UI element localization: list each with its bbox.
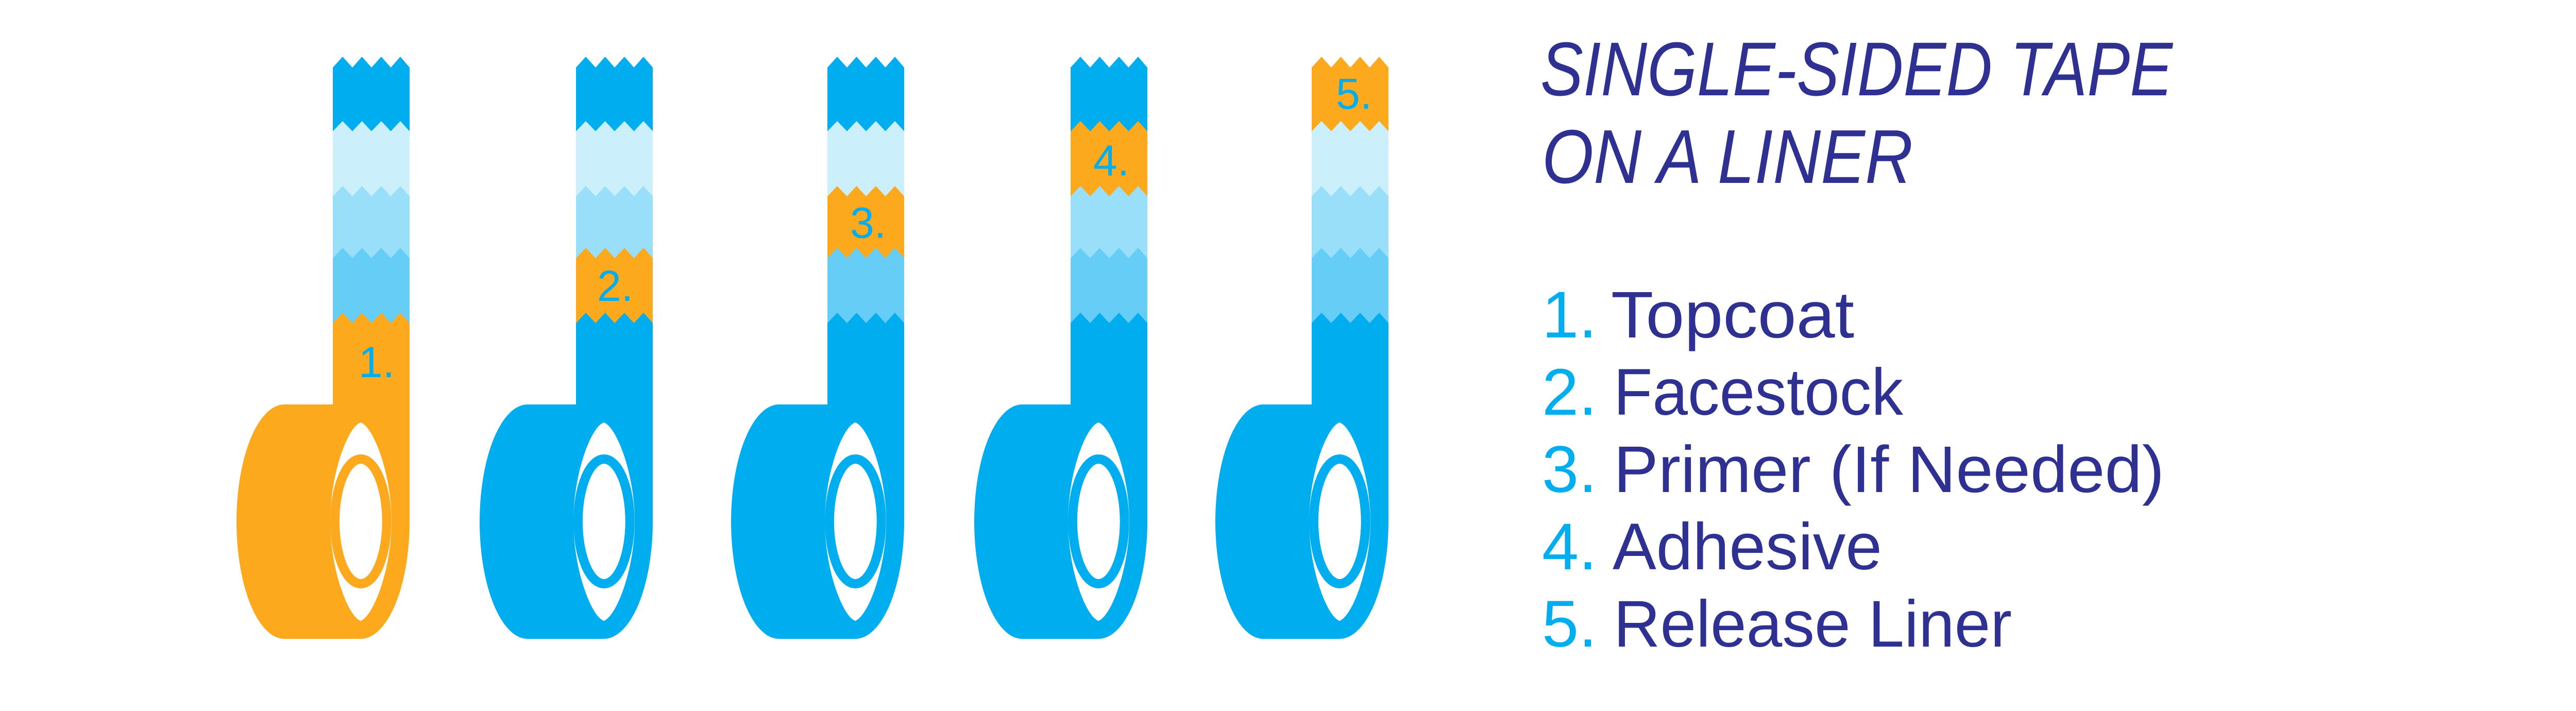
legend item 3: 3. xyxy=(1542,433,1597,506)
tape roll 4: adhesive highlighted xyxy=(974,57,1147,639)
tape layer: third xyxy=(333,186,410,260)
tape layer: fourth xyxy=(333,248,410,326)
roll core ring xyxy=(1073,459,1125,584)
tape layer: second highlighted xyxy=(1071,121,1147,198)
tape layer: second xyxy=(576,121,653,198)
legend item 5: 5. xyxy=(1542,587,1597,661)
tape layer: third highlighted xyxy=(827,186,904,260)
tape roll 5: release liner highlighted xyxy=(1215,57,1388,639)
roll body with tail xyxy=(974,313,1147,639)
roll body with tail xyxy=(236,313,410,639)
label: 4.: 4. xyxy=(1093,137,1129,185)
legend item 3: Primer (If Needed) xyxy=(1614,433,2164,506)
title: SINGLE-SIDED TAPE xyxy=(1540,27,2174,112)
tape layer: second xyxy=(827,121,904,198)
tape layer: fourth xyxy=(1312,248,1388,326)
tape layer: top highlighted xyxy=(1312,57,1388,134)
legend item 2: 2. xyxy=(1542,356,1597,429)
roll body with tail xyxy=(731,313,904,639)
tape layer: third xyxy=(1071,186,1147,260)
tape roll 2: facestock highlighted xyxy=(480,57,653,639)
title: ON A LINER xyxy=(1542,114,1913,199)
label: 2.: 2. xyxy=(597,262,633,310)
tape layer: fourth highlighted xyxy=(576,248,653,326)
label: 1.: 1. xyxy=(359,338,395,386)
tape layer: top xyxy=(1071,57,1147,134)
legend item 4: Adhesive xyxy=(1613,510,1882,584)
tape layer: top xyxy=(827,57,904,134)
legend item 2: Facestock xyxy=(1614,356,1904,429)
tape roll 1: topcoat highlighted xyxy=(236,57,410,639)
tape layer: second xyxy=(333,121,410,198)
roll core ring xyxy=(335,459,387,584)
legend item 4: 4. xyxy=(1542,510,1597,584)
tape layer: top xyxy=(576,57,653,134)
tape layer: third xyxy=(1312,186,1388,260)
label: 5.: 5. xyxy=(1336,70,1372,118)
label: 3.: 3. xyxy=(850,199,886,247)
roll body with tail xyxy=(1215,313,1388,639)
tape layer: top xyxy=(333,57,410,134)
tape layer: fourth xyxy=(827,248,904,326)
roll core ring xyxy=(829,459,882,584)
legend item 1: Topcoat xyxy=(1611,278,1854,352)
title xyxy=(1540,27,2174,199)
numbered legend xyxy=(1542,278,2164,661)
roll body with tail xyxy=(480,313,653,639)
tape layer: third xyxy=(576,186,653,260)
tape roll 3: primer highlighted xyxy=(731,57,904,639)
legend item 5: Release Liner xyxy=(1614,587,2012,661)
legend item 1: 1. xyxy=(1542,278,1597,352)
tape layer: second xyxy=(1312,121,1388,198)
roll core ring xyxy=(578,459,630,584)
tape layer: fourth xyxy=(1071,248,1147,326)
roll core ring xyxy=(1314,459,1366,584)
